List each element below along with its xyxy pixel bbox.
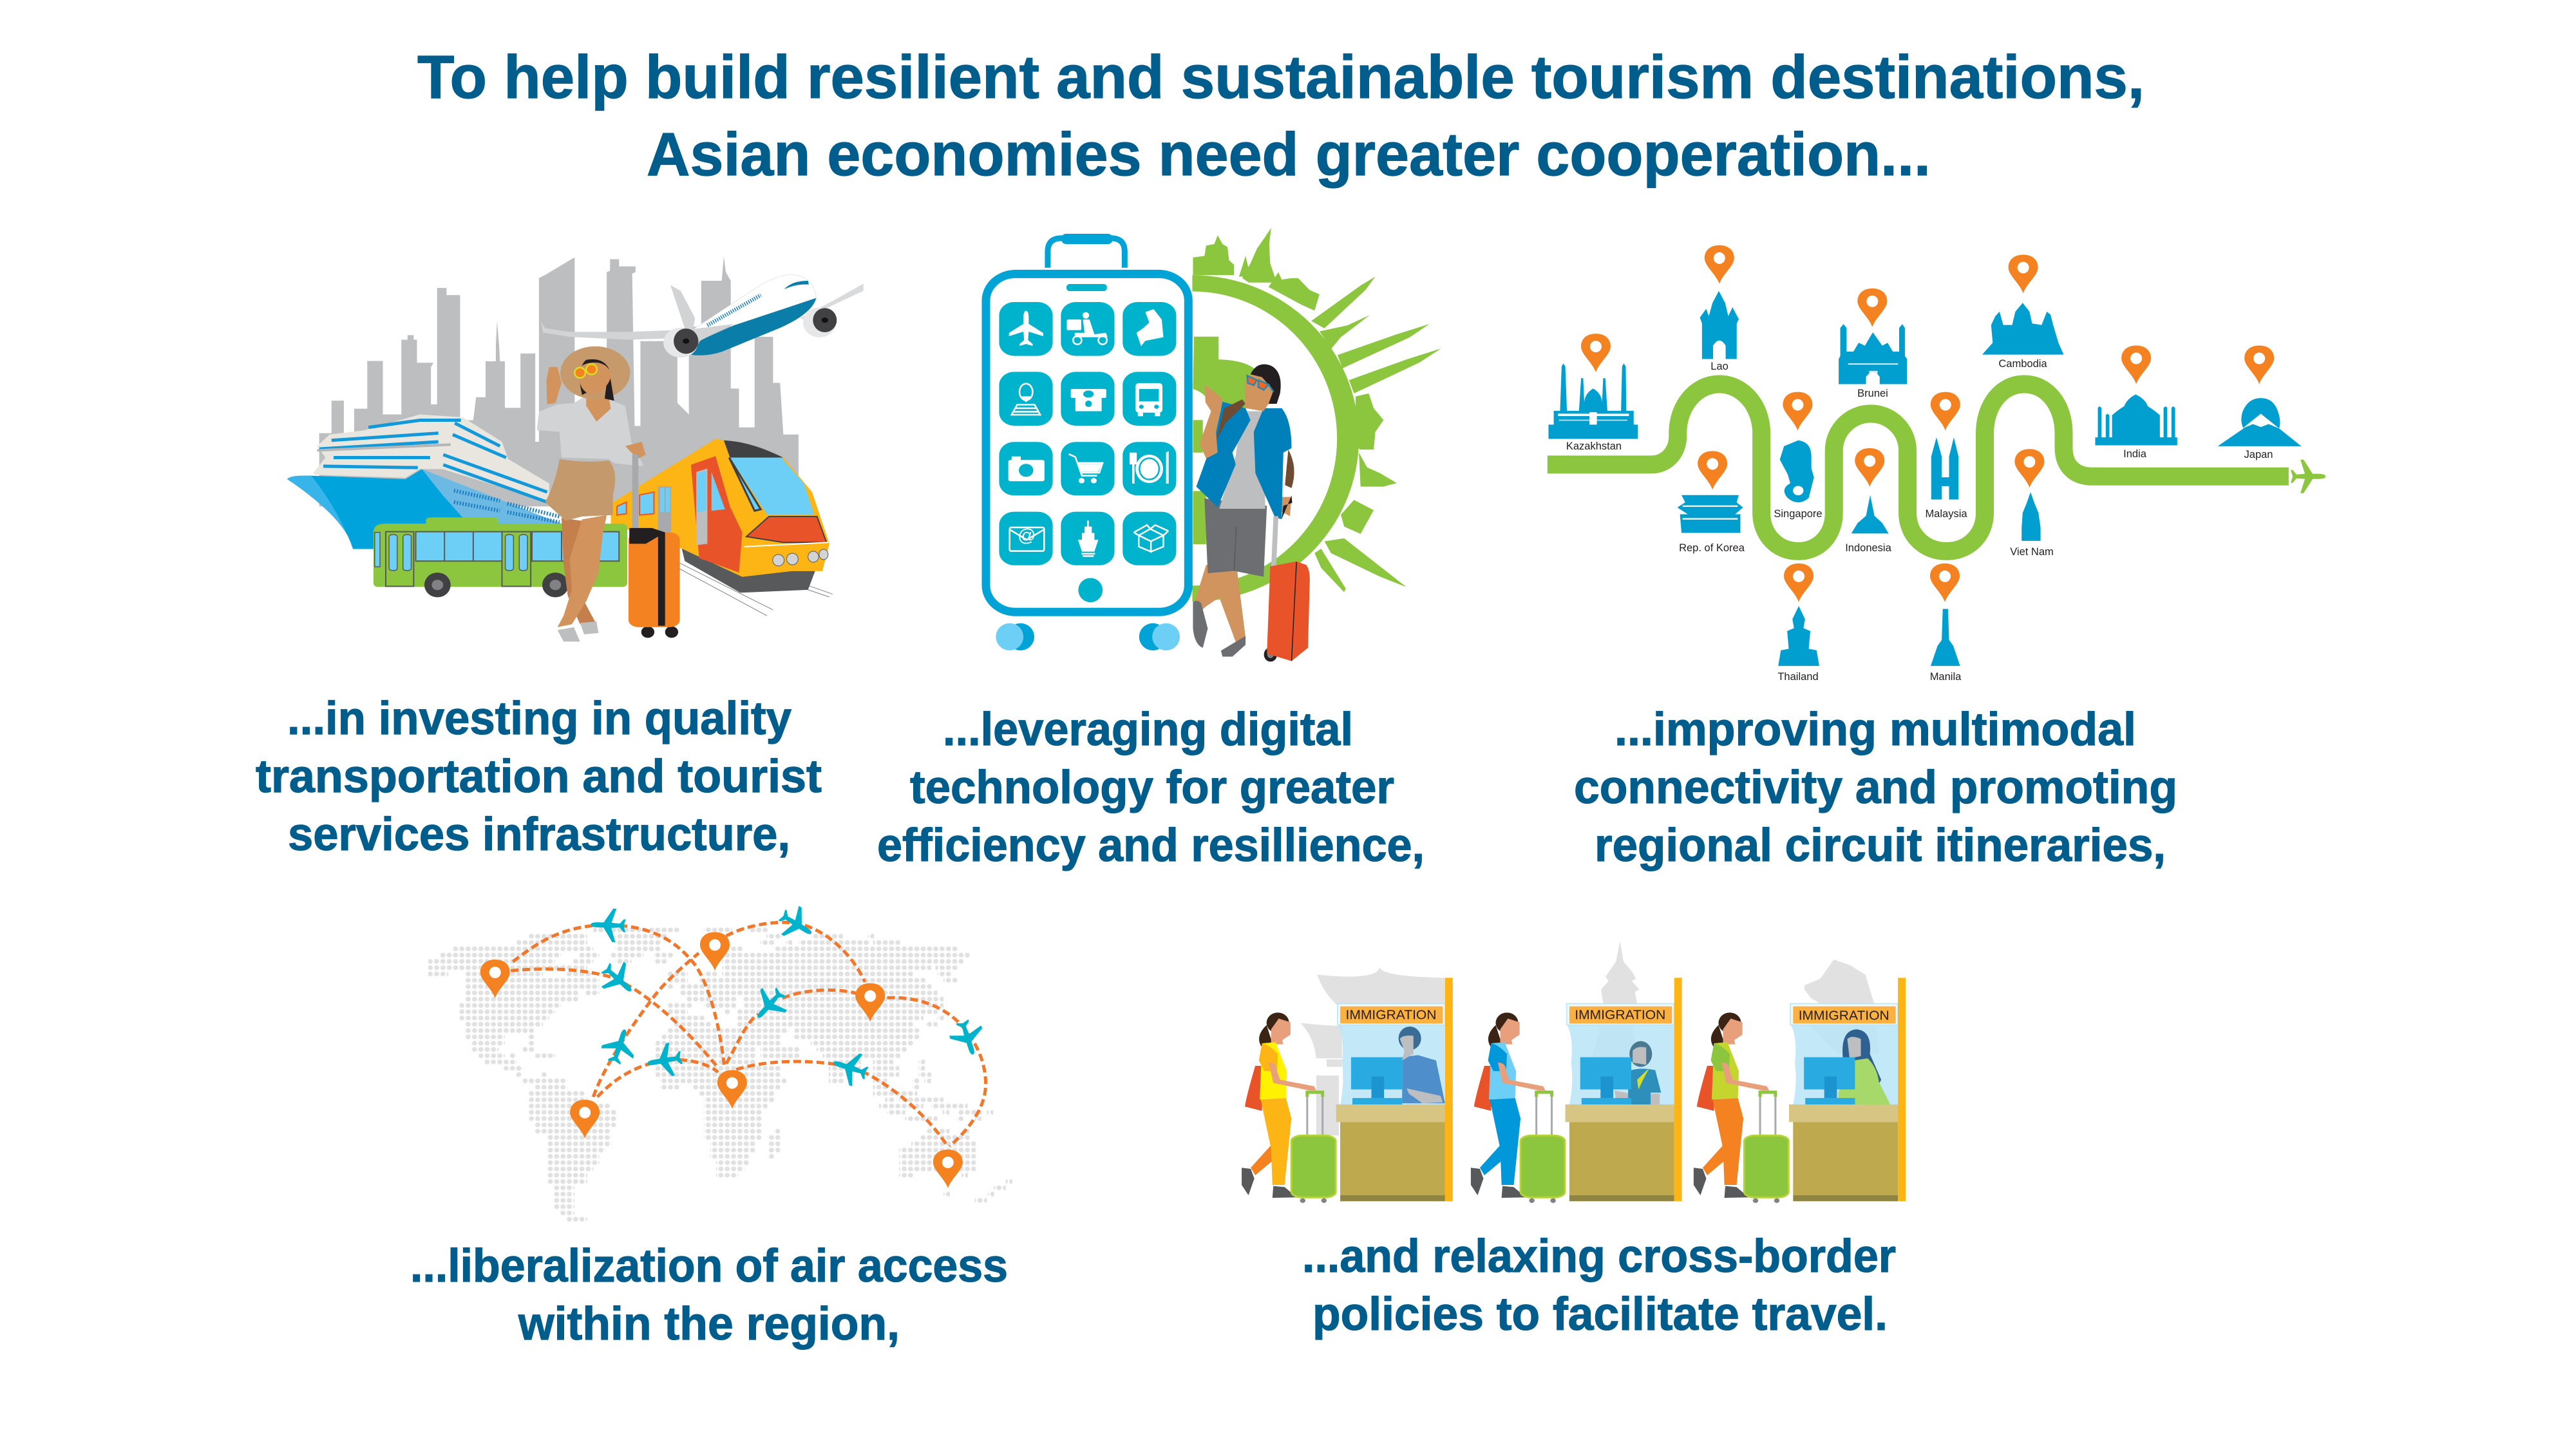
caption 3 <box>1574 704 2177 871</box>
caption 5: ...and relaxing cross-border <box>1302 1231 1896 1282</box>
green route road <box>1548 384 2289 551</box>
illustration: dotted world map with air routes <box>428 901 1012 1218</box>
counter 3 <box>1694 978 1906 1203</box>
grey landmark backdrops <box>1300 942 1879 1135</box>
economy labels: Singapore <box>1774 508 1823 520</box>
caption 3: connectivity and promoting <box>1574 762 2177 813</box>
orange suitcase <box>629 455 680 638</box>
economy labels: Lao <box>1710 361 1728 372</box>
sign text 1: IMMIGRATION <box>1345 1009 1436 1023</box>
male traveller <box>1193 365 1294 657</box>
clerk 1 <box>1399 1027 1445 1103</box>
counter 1 <box>1242 978 1453 1203</box>
illustration: immigration counters <box>1242 942 1906 1203</box>
dotted world map <box>428 930 1012 1218</box>
woman tourist <box>537 346 646 641</box>
route airplane <box>2291 460 2325 493</box>
landmark silhouettes <box>1548 291 2301 666</box>
sign text 2: IMMIGRATION <box>1575 1009 1665 1023</box>
smartphone suitcase body <box>986 234 1188 650</box>
illustration: transport modes and tourist <box>287 256 864 641</box>
caption 2: ...leveraging digital <box>943 704 1353 755</box>
economy labels: Japan <box>2244 449 2273 460</box>
caption 1: ...in investing in quality <box>287 693 791 744</box>
landmark details <box>1558 363 2279 520</box>
cruise ship <box>287 415 562 549</box>
caption 4: within the region, <box>518 1298 900 1350</box>
caption 3: ...improving multimodal <box>1615 704 2136 755</box>
app icons <box>1009 309 1169 556</box>
economy labels <box>1566 358 2273 683</box>
economy labels: Viet Nam <box>2010 546 2054 558</box>
app tiles <box>999 302 1176 565</box>
train <box>611 439 833 616</box>
economy labels: India <box>2123 448 2147 460</box>
skyline <box>319 256 799 506</box>
caption 3: regional circuit itineraries, <box>1595 820 2166 871</box>
economy labels: Indonesia <box>1845 542 1892 554</box>
bus <box>374 517 627 597</box>
orange location pins <box>480 932 963 1188</box>
caption 2: efficiency and resillience, <box>877 820 1425 871</box>
app icons: @ <box>1018 526 1036 545</box>
clerk 3 <box>1838 1029 1890 1104</box>
counter 2 <box>1471 978 1682 1203</box>
caption 1: services infrastructure, <box>288 809 790 860</box>
economy labels: Malaysia <box>1925 508 1967 520</box>
economy labels: Rep. of Korea <box>1679 542 1745 554</box>
caption 1 <box>256 693 822 860</box>
airplane <box>541 274 864 357</box>
sign text 3: IMMIGRATION <box>1799 1009 1889 1023</box>
economy labels: Thailand <box>1777 671 1819 683</box>
red suitcase <box>1264 516 1310 661</box>
title <box>417 43 2145 189</box>
dashed flight routes <box>511 922 986 1146</box>
green landmark ring <box>1192 228 1441 601</box>
caption 4: ...liberalization of air access <box>410 1240 1008 1292</box>
teal airplanes <box>590 901 989 1089</box>
caption 5: policies to facilitate travel. <box>1312 1289 1888 1340</box>
economy labels: Brunei <box>1857 388 1888 399</box>
title: To help build resilient and sustainable tourism destinations, <box>417 43 2145 111</box>
caption 2: technology for greater <box>910 762 1394 813</box>
location pins <box>1581 245 2274 602</box>
caption 1: transportation and tourist <box>256 751 822 802</box>
economy labels: Cambodia <box>1998 358 2047 370</box>
caption 4 <box>410 1240 1008 1350</box>
caption 5 <box>1302 1231 1896 1340</box>
illustration: regional circuit route <box>1548 245 2325 666</box>
economy labels: Manila <box>1930 671 1962 683</box>
clerk 2 <box>1615 1041 1661 1104</box>
economy labels: Kazakhstan <box>1566 440 1622 452</box>
illustration: digital phone suitcase and traveller <box>986 228 1441 661</box>
caption 2 <box>877 704 1425 871</box>
title: Asian economies need greater cooperation... <box>647 120 1931 189</box>
